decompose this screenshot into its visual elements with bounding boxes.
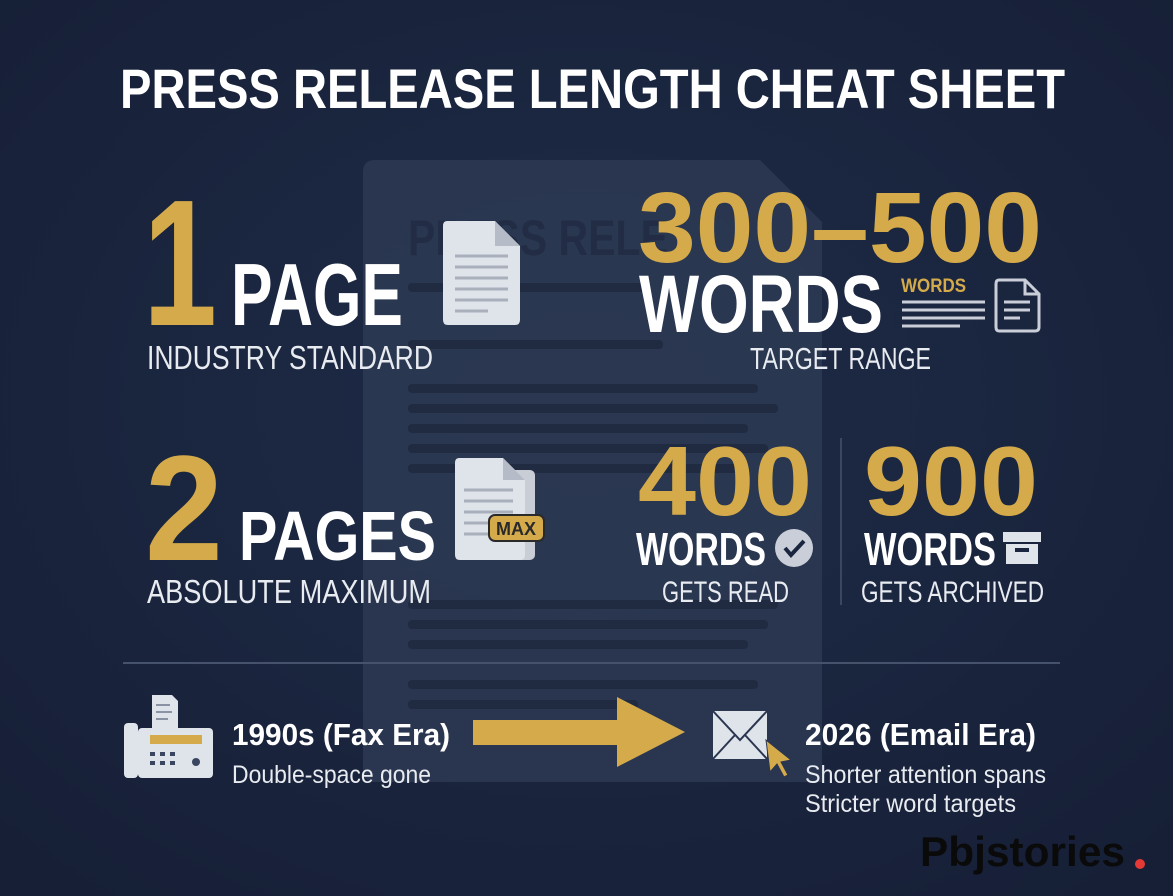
- background ghost document: PRESS RELE: [408, 210, 668, 266]
- fax era text: [232, 717, 450, 789]
- stat: 2 pages: 2: [145, 424, 223, 592]
- stat: 400 words gets read: GETS READ: [662, 576, 789, 609]
- arrow: [473, 697, 685, 767]
- stat: 1 page: PAGE: [231, 245, 403, 344]
- stat: 400 words gets read: 400: [638, 426, 812, 536]
- icon: stacked documents with MAX badge: MAX: [496, 519, 536, 539]
- email era text: 2026 (Email Era): [805, 717, 1036, 752]
- icon: words lines: WORDS: [901, 276, 966, 297]
- email era text: Stricter word targets: [805, 790, 1016, 818]
- logo: Pbjstories: [920, 828, 1125, 875]
- stat: 2 pages: PAGES: [239, 497, 436, 575]
- icon: stacked documents with MAX badge: [455, 458, 544, 560]
- stat: 1 page: INDUSTRY STANDARD: [147, 339, 433, 376]
- icon: check circle: [775, 529, 813, 567]
- fax era text: Double-space gone: [232, 761, 431, 789]
- stat: 300-500 words: [638, 172, 1042, 376]
- stat: 1 page: 1: [143, 163, 217, 364]
- icon: fax machine: [124, 695, 213, 778]
- stat: 300-500 words: WORDS: [639, 259, 883, 350]
- stat: 400 words gets read: WORDS: [636, 523, 766, 575]
- email era text: [805, 717, 1046, 818]
- stat: 900 words gets archived: GETS ARCHIVED: [861, 576, 1044, 609]
- email era text: Shorter attention spans: [805, 761, 1046, 789]
- stat: 1 page: [143, 163, 433, 376]
- icon: envelope with cursor: [712, 710, 791, 777]
- icon: archive box: [1003, 532, 1041, 564]
- icon: words lines: [901, 276, 985, 326]
- stat: 400 words gets read: [636, 426, 812, 609]
- icon: single document: [443, 221, 520, 325]
- stat: 900 words gets archived: [861, 426, 1044, 609]
- stat: 2 pages: ABSOLUTE MAXIMUM: [147, 573, 431, 610]
- stat: 300-500 words: 300–500: [638, 172, 1042, 284]
- fax era text: 1990s (Fax Era): [232, 717, 450, 752]
- stat: 900 words gets archived: 900: [864, 426, 1038, 536]
- stat: 2 pages: [145, 424, 436, 610]
- stat: 300-500 words: TARGET RANGE: [750, 341, 931, 376]
- stat: 900 words gets archived: WORDS: [864, 523, 996, 575]
- icon: outline document: [996, 280, 1039, 331]
- background ghost document: [363, 160, 822, 782]
